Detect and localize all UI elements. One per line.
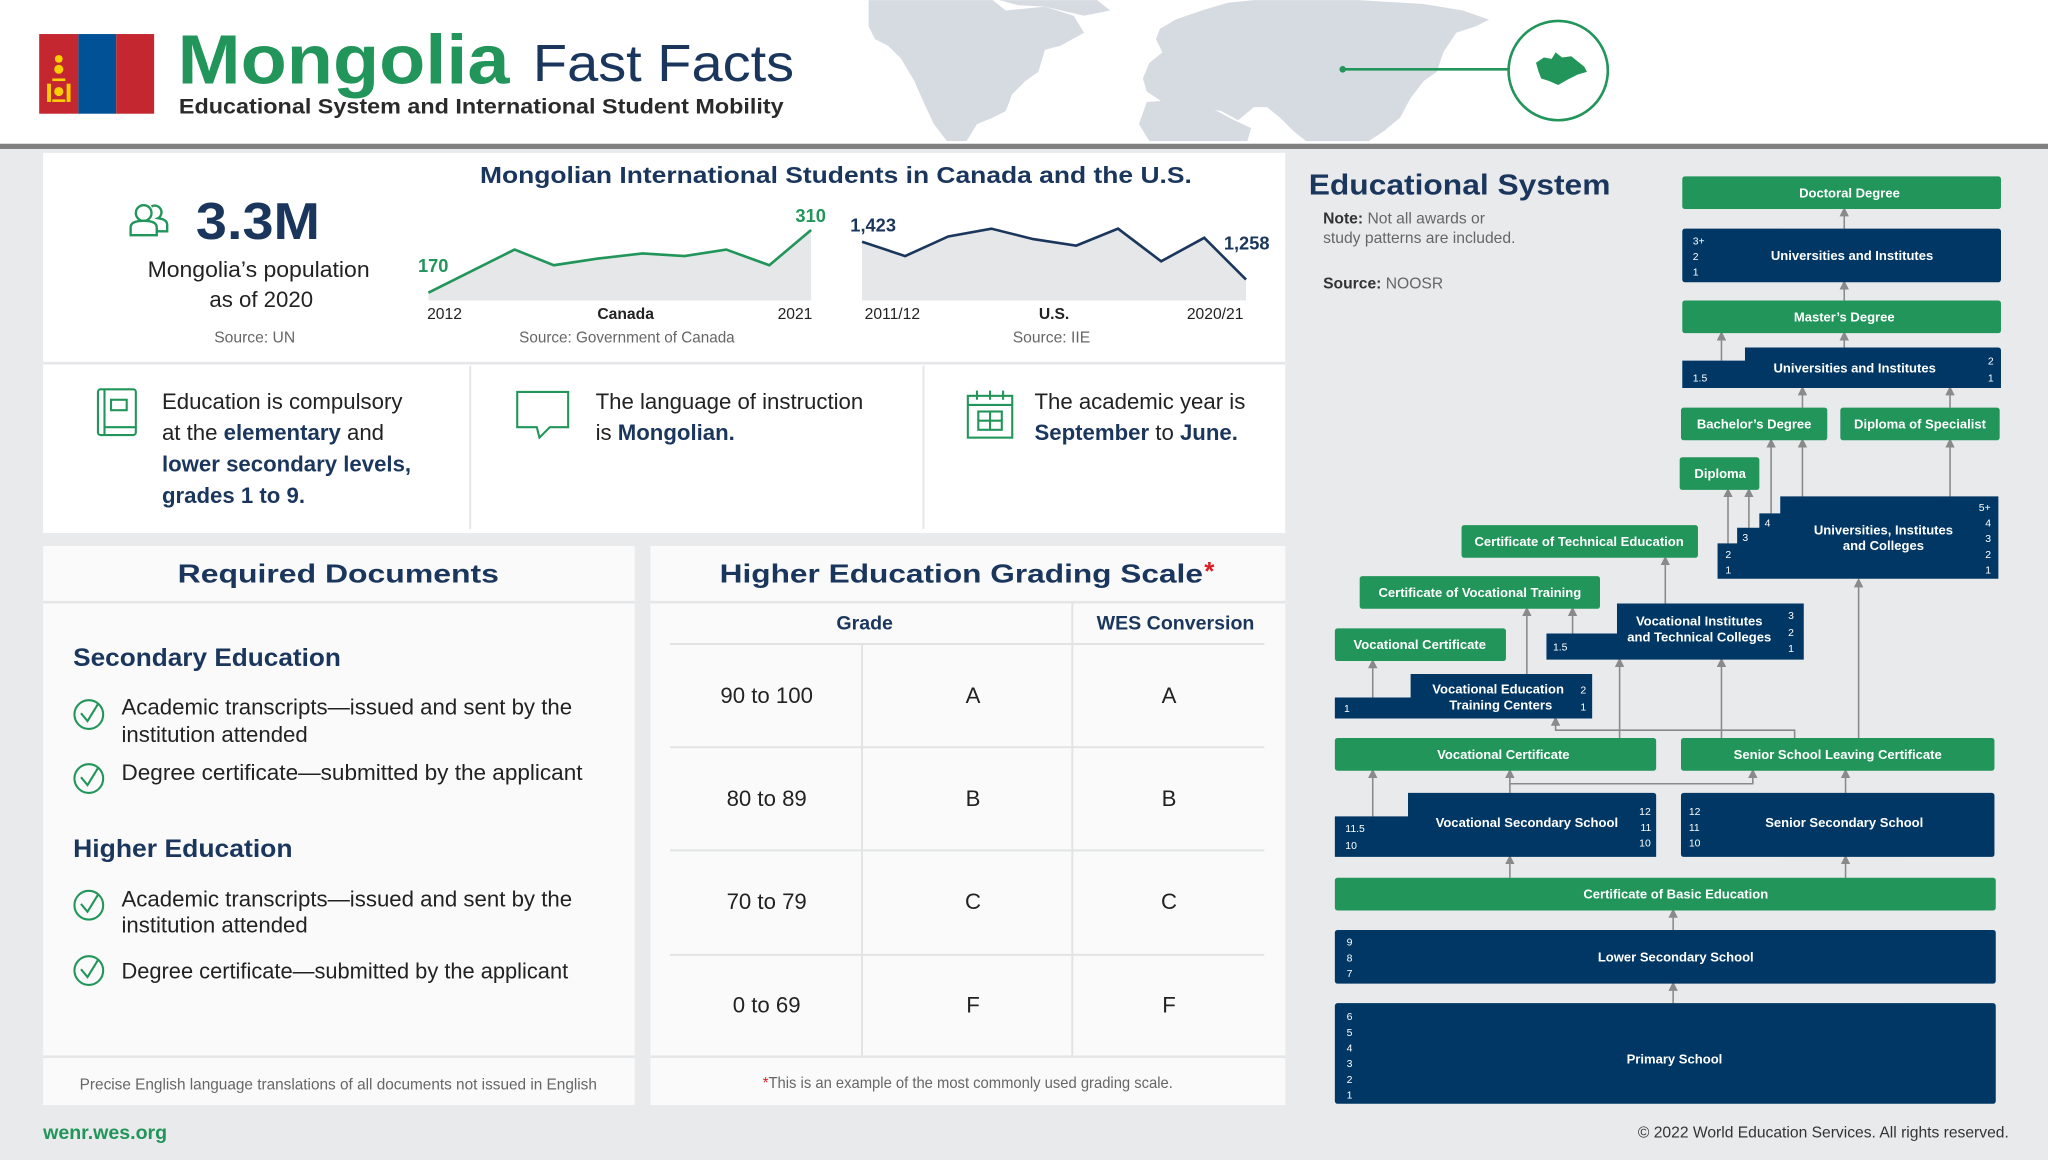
icon: checks (74, 700, 103, 985)
population stat: as of 2020 (209, 287, 313, 312)
chart: us: 1,258 (1224, 233, 1270, 254)
box: primary school: 1 (1347, 1091, 1353, 1102)
box: lower secondary school: 9 (1347, 938, 1353, 949)
chart: canada: Canada (597, 306, 654, 323)
box: vocational certificate: Vocational Certificate (1437, 747, 1570, 762)
box: vocational secondary school: 11.5 (1345, 824, 1365, 835)
box: vocational institutes and technical colleges (1546, 604, 1804, 660)
panel: required documents: institution attended (121, 913, 308, 938)
panel: grading scale: 90 to 100 (720, 683, 813, 708)
box: primary school: 5 (1347, 1028, 1353, 1039)
box: bachelor's degree (1681, 408, 1827, 440)
box: certificate of technical education (1462, 525, 1698, 558)
chart: canada: 2021 (778, 306, 812, 323)
box: vocational education training centers: 1 (1344, 704, 1350, 715)
fact: language: The language of instruction (596, 389, 863, 414)
footer (42, 1122, 2009, 1144)
box: vocational education training centers (1335, 674, 1592, 718)
panel: grading scale (650, 546, 1285, 1105)
fact: language: is Mongolian. (596, 420, 735, 445)
box: master's degree (1682, 300, 2001, 333)
box: diploma of specialist: Diploma of Specialist (1854, 416, 1987, 431)
box: vocational secondary school: Vocational Secondary School (1436, 815, 1618, 830)
population stat (148, 193, 370, 346)
box: universities, institutes and colleges: and Colleges (1843, 538, 1924, 553)
footer: wenr.wes.org (42, 1122, 167, 1144)
box: lower secondary school: 7 (1347, 969, 1353, 980)
box: universities and institutes (doctoral): Universities and Institutes (1771, 248, 1933, 263)
box: primary school (1335, 1003, 1996, 1104)
chart: us: 2020/21 (1187, 306, 1243, 323)
fact: language (517, 389, 863, 445)
panel: required documents: Required Documents (178, 559, 499, 589)
box: certificate of basic education (1335, 878, 1996, 910)
box: senior school leaving certificate: Senior School Leaving Certificate (1734, 747, 1942, 762)
box: doctoral degree (1682, 176, 2001, 209)
box: vocational education training centers: 2 (1580, 686, 1586, 697)
fact: compulsory education: lower secondary levels, (162, 452, 411, 477)
panel: educational system: Note: Not all awards or (1323, 210, 1485, 227)
chart: us: 1,423 (850, 214, 896, 235)
box: lower secondary school: Lower Secondary School (1598, 949, 1754, 964)
box: universities, institutes and colleges: 2 (1985, 550, 1991, 561)
icon: people (131, 205, 167, 235)
box: universities, institutes and colleges: 3 (1985, 534, 1991, 545)
box: certificate of basic education: Certificate of Basic Education (1583, 887, 1768, 902)
box: vocational certificate (small): Vocational Certificate (1354, 637, 1486, 652)
panel: educational system: Educational System (1309, 170, 1610, 202)
box: vocational institutes and technical colleges: 2 (1788, 628, 1794, 639)
box: lower secondary school (1335, 930, 1996, 984)
panel: grading scale: A (966, 683, 981, 708)
panel: required documents: Degree certificate—submitted by the applicant (121, 958, 568, 983)
box: universities and institutes (doctoral) (1682, 229, 2001, 282)
fact: academic year: The academic year is (1034, 389, 1245, 414)
panel: stats (43, 153, 1285, 533)
panel: grading scale: * (1204, 556, 1215, 586)
box: vocational institutes and technical colleges: and Technical Colleges (1627, 629, 1771, 644)
title: Mongolia (178, 21, 510, 99)
box: certificate of vocational training (1360, 576, 1600, 609)
panel: grading scale: Grade (836, 613, 893, 635)
box: primary school: 6 (1347, 1012, 1353, 1023)
box: universities, institutes and colleges: 4 (1765, 518, 1771, 529)
box: universities and institutes (master's): 2 (1988, 356, 1994, 367)
chart: us: 2011/12 (865, 306, 920, 323)
box: certificate of vocational training: Certificate of Vocational Training (1378, 585, 1581, 600)
box: universities, institutes and colleges: 5+ (1979, 503, 1991, 514)
panel: grading scale: C (1161, 889, 1177, 914)
icon: mongolia locator (1339, 21, 1608, 120)
world map (869, 0, 1489, 141)
footer: © 2022 World Education Services. All rights reserved. (1638, 1125, 2009, 1142)
box: diploma: Diploma (1694, 466, 1747, 481)
box: universities, institutes and colleges: 1 (1725, 565, 1731, 576)
chart: canada: Source: Government of Canada (519, 329, 735, 346)
fact: academic year: September to June. (1034, 420, 1238, 445)
chart: us: Source: IIE (1013, 329, 1090, 346)
population stat: Source: UN (214, 329, 295, 346)
panel: grading scale: B (966, 786, 980, 811)
box: primary school: 4 (1347, 1044, 1353, 1055)
box: senior secondary school: Senior Secondary School (1765, 815, 1923, 830)
chart: us (850, 214, 1270, 346)
box: vocational education training centers: 1 (1580, 703, 1586, 714)
box: vocational institutes and technical colleges: Vocational Institutes (1636, 614, 1763, 629)
box: master's degree: Master’s Degree (1794, 309, 1895, 324)
panel: required documents: Academic transcripts—issued and sent by the (121, 695, 572, 720)
box: universities, institutes and colleges: 3 (1742, 533, 1748, 544)
box: senior secondary school (1681, 793, 1994, 857)
title: Educational System and International Student Mobility (179, 96, 784, 119)
box: universities, institutes and colleges (1718, 496, 1998, 579)
box: universities and institutes (master's): Universities and Institutes (1773, 360, 1936, 375)
box: vocational education training centers: Training Centers (1449, 697, 1552, 712)
panel: required documents: Secondary Education (73, 645, 341, 672)
box: universities, institutes and colleges: Universities, Institutes (1814, 522, 1953, 537)
box: senior secondary school: 10 (1689, 838, 1701, 849)
box: vocational certificate (1335, 738, 1656, 771)
panel: grading scale: B (1162, 786, 1176, 811)
box: universities and institutes (doctoral): 2 (1693, 252, 1699, 263)
panel: grading scale: A (1162, 683, 1177, 708)
box: universities, institutes and colleges: 2 (1725, 550, 1731, 561)
chart: canada (418, 205, 826, 346)
box: primary school: Primary School (1627, 1051, 1722, 1066)
box: senior secondary school: 11 (1689, 823, 1700, 834)
box: universities, institutes and colleges: 4 (1985, 518, 1991, 529)
panel: grading scale: WES Conversion (1097, 613, 1254, 635)
fact: academic year (968, 389, 1245, 445)
chart: canada: 2012 (427, 306, 462, 323)
population stat: Mongolia’s population (148, 257, 370, 282)
box: primary school: 2 (1347, 1075, 1353, 1086)
box: vocational secondary school: 10 (1345, 841, 1357, 852)
panel: required documents: Academic transcripts—issued and sent by the (121, 887, 572, 912)
box: primary school: 3 (1347, 1059, 1353, 1070)
panel: grading scale: 70 to 79 (727, 889, 807, 914)
title (178, 21, 794, 119)
panel: grading scale: F (1162, 992, 1176, 1017)
box: doctoral degree: Doctoral Degree (1799, 185, 1900, 200)
box: lower secondary school: 8 (1347, 953, 1353, 964)
panel: educational system: Source: NOOSR (1323, 276, 1443, 293)
chart: canada: 170 (418, 255, 448, 276)
title: Fast Facts (533, 35, 794, 93)
box: senior secondary school: 12 (1689, 807, 1701, 818)
arrows (1373, 212, 1950, 1003)
box: universities, institutes and colleges: 1 (1985, 565, 1991, 576)
flag (39, 34, 154, 114)
fact: compulsory education: grades 1 to 9. (162, 483, 305, 508)
panel: required documents: institution attended (121, 722, 308, 747)
box: universities and institutes (master's) (1682, 348, 2001, 388)
panel: educational system (1309, 170, 2001, 1104)
panel: required documents: Degree certificate—submitted by the applicant (121, 760, 583, 785)
panel: required documents: Higher Education (73, 836, 293, 863)
box: vocational secondary school (1335, 793, 1656, 857)
box: universities and institutes (master's): 1.5 (1693, 373, 1707, 384)
panel: grading scale: *This is an example of the most commonly used grading scale. (763, 1075, 1173, 1092)
box: vocational certificate (small) (1335, 628, 1506, 661)
box: universities and institutes (master's): 1 (1988, 373, 1994, 384)
chart: canada: 310 (795, 205, 826, 226)
panel: grading scale: 0 to 69 (733, 992, 801, 1017)
box: bachelor's degree: Bachelor’s Degree (1697, 416, 1811, 431)
panel: grading scale: 80 to 89 (727, 786, 807, 811)
panel: required documents (43, 546, 635, 1105)
fact: compulsory education: at the elementary and (162, 420, 384, 445)
panel: required documents: Precise English language translations of all documents not issued in English (80, 1076, 597, 1093)
box: certificate of technical education: Certificate of Technical Education (1474, 534, 1684, 549)
box: vocational secondary school: 10 (1639, 838, 1651, 849)
population stat: 3.3M (196, 193, 320, 251)
box: diploma (1680, 457, 1759, 490)
panel: grading scale: F (966, 992, 980, 1017)
panel: grading scale: C (965, 889, 981, 914)
chart title: Mongolian International Students in Canada and the U.S. (480, 162, 1192, 188)
panel: educational system: study patterns are included. (1323, 230, 1515, 247)
box: senior school leaving certificate (1681, 738, 1994, 771)
box: vocational institutes and technical colleges: 1.5 (1553, 643, 1568, 654)
box: diploma of specialist (1840, 408, 2000, 440)
box: vocational institutes and technical colleges: 3 (1788, 611, 1794, 622)
box: vocational secondary school: 12 (1639, 807, 1651, 818)
fact: compulsory education (98, 389, 411, 508)
header (0, 0, 2048, 149)
box: vocational education training centers: Vocational Education (1432, 682, 1564, 697)
chart: us: U.S. (1039, 306, 1069, 323)
fact: compulsory education: Education is compulsory (162, 389, 403, 414)
box: universities and institutes (doctoral): 3+ (1693, 236, 1705, 247)
box: vocational institutes and technical colleges: 1 (1788, 644, 1794, 655)
box: vocational secondary school: 11 (1640, 823, 1652, 834)
box: universities and institutes (doctoral): 1 (1693, 268, 1699, 279)
panel: grading scale: Higher Education Grading Scale (720, 559, 1203, 589)
